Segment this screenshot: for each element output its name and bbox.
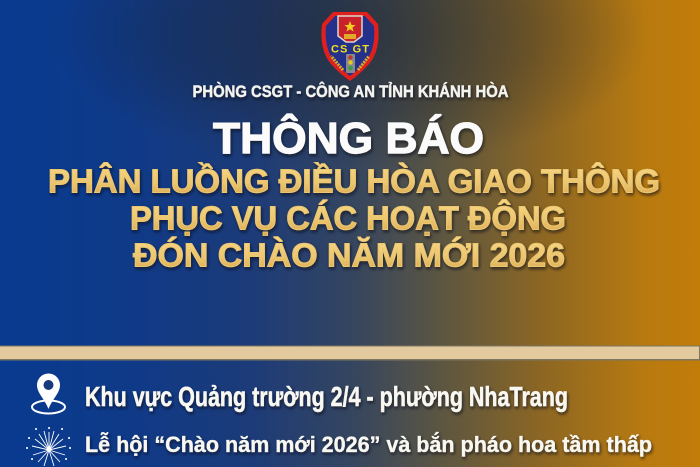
subtitle line 3: ĐÓN CHÀO NĂM MỚI 2026 — [133, 236, 565, 274]
icon: location pin — [32, 374, 65, 414]
event text: Lễ hội “Chào năm mới 2026” và bắn pháo hoa tầm thấp — [85, 432, 652, 457]
subtitle line 2: PHỤC VỤ CÁC HOẠT ĐỘNG — [130, 198, 566, 236]
divider band — [0, 346, 700, 360]
logo: CSGT shield — [321, 12, 379, 81]
title: THÔNG BÁO — [213, 112, 484, 163]
department heading: PHÒNG CSGT - CÔNG AN TỈNH KHÁNH HÒA — [192, 82, 508, 101]
traffic light — [346, 54, 355, 73]
subtitle line 1: PHÂN LUỒNG ĐIỀU HÒA GIAO THÔNG — [48, 162, 660, 200]
shield emblem — [338, 16, 362, 42]
CS GT label: CS GT — [331, 44, 369, 56]
location text: Khu vực Quảng trường 2/4 - phường NhaTrang — [85, 381, 568, 412]
top shade — [0, 0, 700, 170]
icon: fireworks — [27, 428, 70, 466]
